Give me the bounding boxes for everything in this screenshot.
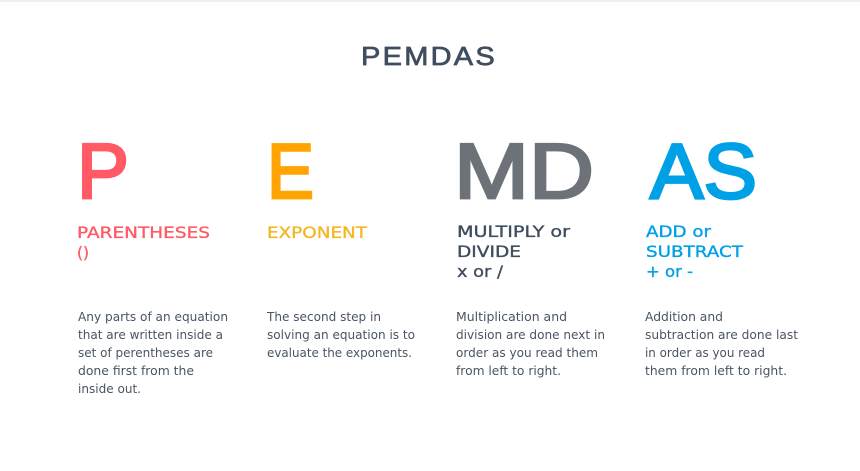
text: add or subtract description: [645, 309, 798, 378]
text: parentheses description: done first from the: [78, 363, 194, 378]
big letter P: P: [77, 127, 129, 215]
heading: parentheses: [77, 223, 210, 262]
title: PEMDAS: [361, 43, 497, 71]
panel: add or subtract: [645, 127, 798, 378]
heading: add or subtract: ADD or: [646, 222, 711, 241]
big letters MD: MD: [454, 127, 594, 215]
panel: multiply or divide: [454, 127, 605, 378]
text: multiply or divide description: division are done next in: [456, 327, 605, 342]
text: parentheses description: that are written inside a: [78, 327, 223, 342]
big letters AS: AS: [650, 127, 757, 215]
text: exponent description: evaluate the exponents.: [267, 345, 412, 360]
heading: multiply or divide: MULTIPLY or: [457, 222, 570, 241]
text: multiply or divide description: Multiplication and: [456, 309, 567, 324]
text: multiply or divide description: [456, 309, 605, 378]
big letter E: E: [267, 127, 314, 215]
heading: multiply or divide: x or /: [457, 262, 504, 281]
heading: add or subtract: SUBTRACT: [646, 242, 743, 261]
text: parentheses description: [78, 309, 228, 396]
heading: exponent: EXPONENT: [267, 223, 367, 242]
heading: add or subtract: [646, 222, 743, 281]
heading: parentheses: PARENTHESES: [77, 223, 210, 242]
text: add or subtract description: subtraction are done last: [645, 327, 798, 342]
text: exponent description: The second step in: [266, 309, 381, 324]
panel: exponent: [266, 127, 415, 360]
heading: add or subtract: + or -: [646, 262, 693, 281]
text: parentheses description: Any parts of an equation: [78, 309, 228, 324]
text: add or subtract description: in order as you read: [645, 345, 765, 360]
text: add or subtract description: them from left to right.: [645, 363, 787, 378]
text: exponent description: [266, 309, 415, 360]
text: parentheses description: inside out.: [78, 381, 141, 396]
heading: multiply or divide: [457, 222, 570, 281]
text: multiply or divide description: from left to right.: [456, 363, 561, 378]
text: exponent description: solving an equation is to: [267, 327, 415, 342]
panel: parentheses: [77, 127, 228, 396]
heading: multiply or divide: DIVIDE: [457, 242, 521, 261]
text: multiply or divide description: order as you read them: [456, 345, 598, 360]
text: parentheses description: set of perentheses are: [78, 345, 213, 360]
text: add or subtract description: Addition and: [645, 309, 723, 324]
heading: parentheses: (): [77, 243, 89, 262]
